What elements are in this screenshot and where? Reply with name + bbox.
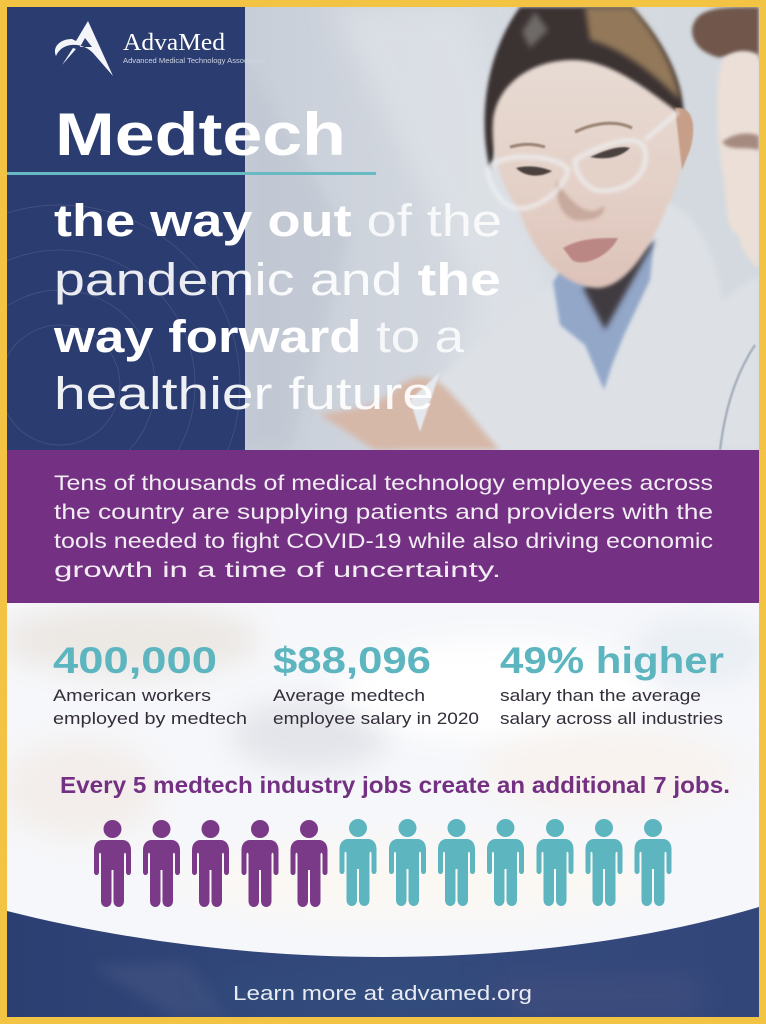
icons: 5 purple people	[94, 820, 328, 907]
illustration: safety glasses	[487, 112, 678, 208]
heading: subtitle: way forward to a	[53, 311, 465, 362]
panel: curved footer	[7, 907, 759, 1018]
illustration: blue shirt	[553, 240, 654, 390]
stat: $88,096: $88,096	[273, 640, 431, 681]
decorative arcs	[7, 204, 240, 450]
heading: jobs multiplier: Every 5 medtech industry jobs create an additional 7 jobs.	[60, 772, 730, 798]
stat: 49% higher: salary across all industries	[500, 709, 723, 728]
illustration: hands	[320, 377, 500, 450]
illustration: face	[493, 60, 683, 288]
illustration: lab coat	[588, 207, 756, 447]
heading: subtitle: pandemic and the	[54, 254, 501, 305]
text block: intro paragraph: tools needed to fight COVID-19 while also driving economic	[54, 530, 713, 553]
heading: subtitle: healthier future	[54, 368, 434, 419]
logo wordmark: AdvaMed	[123, 30, 225, 56]
panel: purple intro	[7, 450, 759, 603]
illustration: eyes and brows	[516, 147, 630, 176]
illustration: neck shadow	[583, 240, 655, 330]
stat: 49% higher: salary than the average	[500, 686, 701, 705]
text block: intro paragraph: Tens of thousands of medical technology employees across	[54, 472, 713, 495]
heading: subtitle: the way out of the	[54, 195, 502, 246]
title: Medtech: Medtech	[55, 101, 346, 168]
stat: $88,096: employee salary in 2020	[273, 709, 479, 728]
panel: hero photo	[245, 7, 759, 450]
illustration: hair	[485, 7, 684, 170]
heading: subtitle	[53, 195, 502, 419]
panel: navy left column	[7, 7, 245, 450]
stat: 400,000	[53, 640, 247, 728]
stat: 400,000: 400,000	[53, 640, 217, 681]
stat: 400,000: American workers	[53, 686, 211, 705]
icons: 7 teal people	[340, 819, 672, 906]
text block: intro paragraph: growth in a time of uncertainty.	[54, 559, 501, 582]
text block: intro paragraph: the country are supplying patients and providers with the	[54, 501, 713, 524]
chart: 12 people pictogram	[94, 819, 672, 907]
text block: intro paragraph	[54, 472, 713, 582]
illustration: lips	[563, 238, 618, 262]
stat: $88,096	[273, 640, 479, 728]
panel: stats background	[0, 603, 766, 963]
icon: AdvaMed mark	[55, 21, 113, 76]
footer link text: Learn more at advamed.org	[233, 983, 532, 1005]
stat: 49% higher: 49% higher	[500, 640, 724, 681]
stat: 49% higher	[500, 640, 724, 728]
logo: AdvaMed	[55, 21, 266, 76]
logo tagline: Advanced Medical Technology Association	[123, 58, 266, 65]
stat: $88,096: Average medtech	[273, 686, 425, 705]
divider line	[7, 172, 376, 175]
illustration: colleague	[692, 7, 759, 60]
stat: 400,000: employed by medtech	[53, 709, 247, 728]
